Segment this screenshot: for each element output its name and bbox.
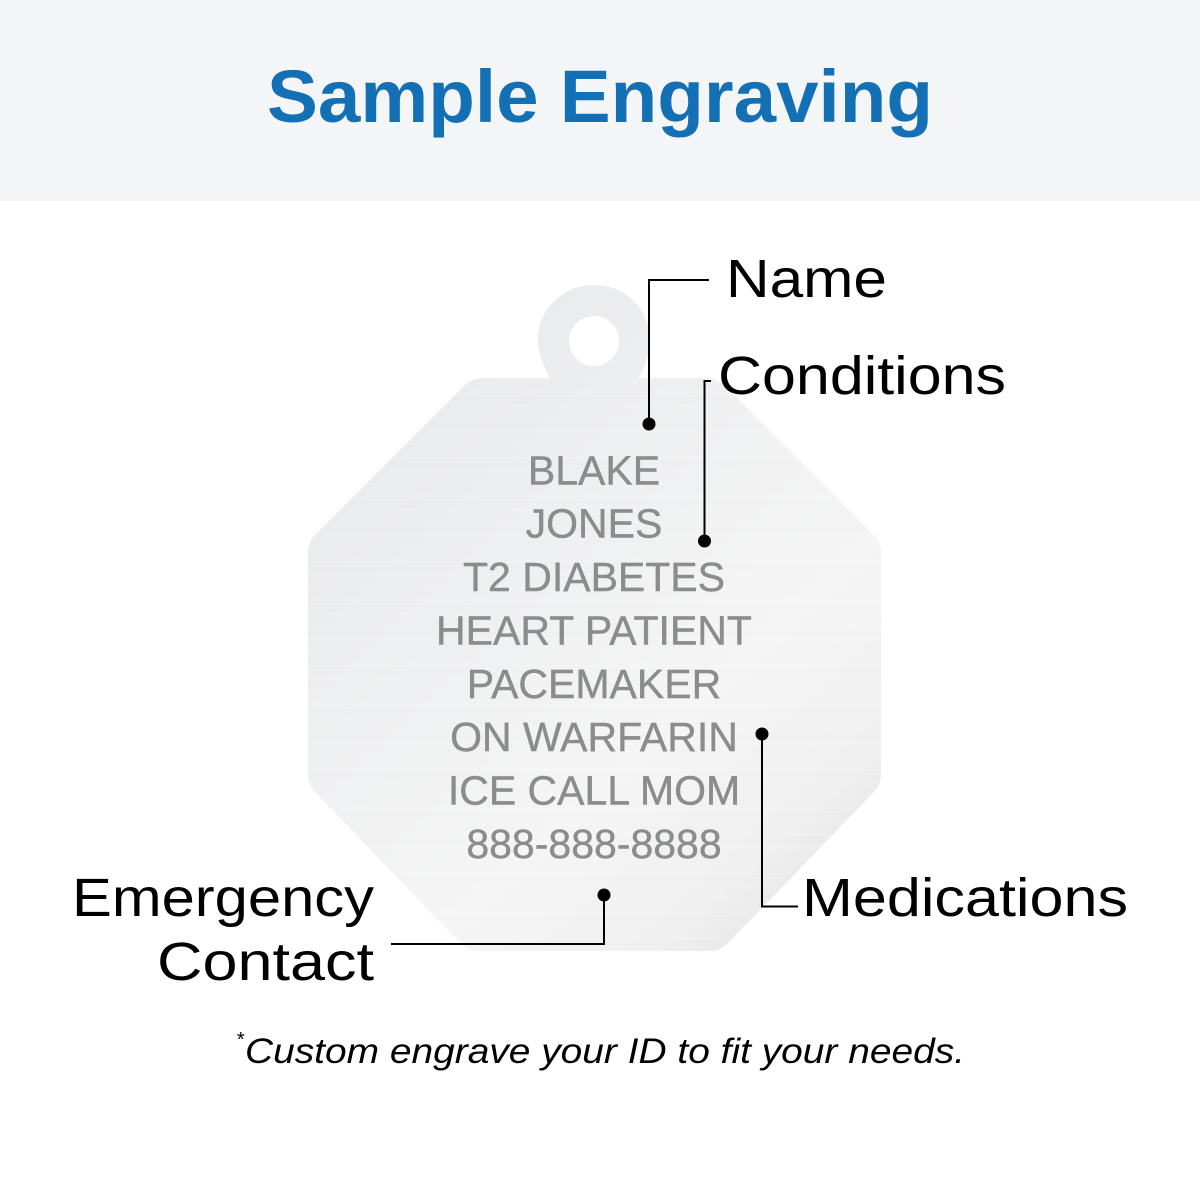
footnote: * — [236, 1029, 245, 1051]
engraved text: ICE CALL MOM — [448, 768, 740, 814]
engraved text: ON WARFARIN — [450, 714, 738, 760]
callout: emergency contact: Emergency — [72, 868, 374, 928]
footnote: Custom engrave your ID to fit your needs. — [245, 1032, 965, 1071]
callout: conditions — [698, 346, 1006, 548]
callout: medications: Medications — [802, 868, 1128, 928]
engraved text — [436, 448, 752, 867]
callout: emergency contact: Contact — [157, 932, 374, 992]
engraved text: BLAKE — [528, 448, 660, 494]
callout: name: Name — [726, 249, 887, 309]
medical ID tag — [308, 285, 881, 951]
engraved text: PACEMAKER — [467, 661, 721, 707]
engraved text: T2 DIABETES — [463, 554, 725, 600]
engraved text: HEART PATIENT — [436, 608, 752, 654]
title: Sample Engraving — [267, 55, 933, 138]
engraved text: JONES — [526, 500, 662, 546]
callout: name — [642, 249, 887, 430]
callout: conditions: Conditions — [718, 346, 1006, 406]
header band — [0, 0, 1200, 201]
engraved text: 888-888-8888 — [466, 821, 722, 867]
callout: emergency contact — [72, 868, 610, 992]
callout: medications — [756, 728, 1128, 928]
